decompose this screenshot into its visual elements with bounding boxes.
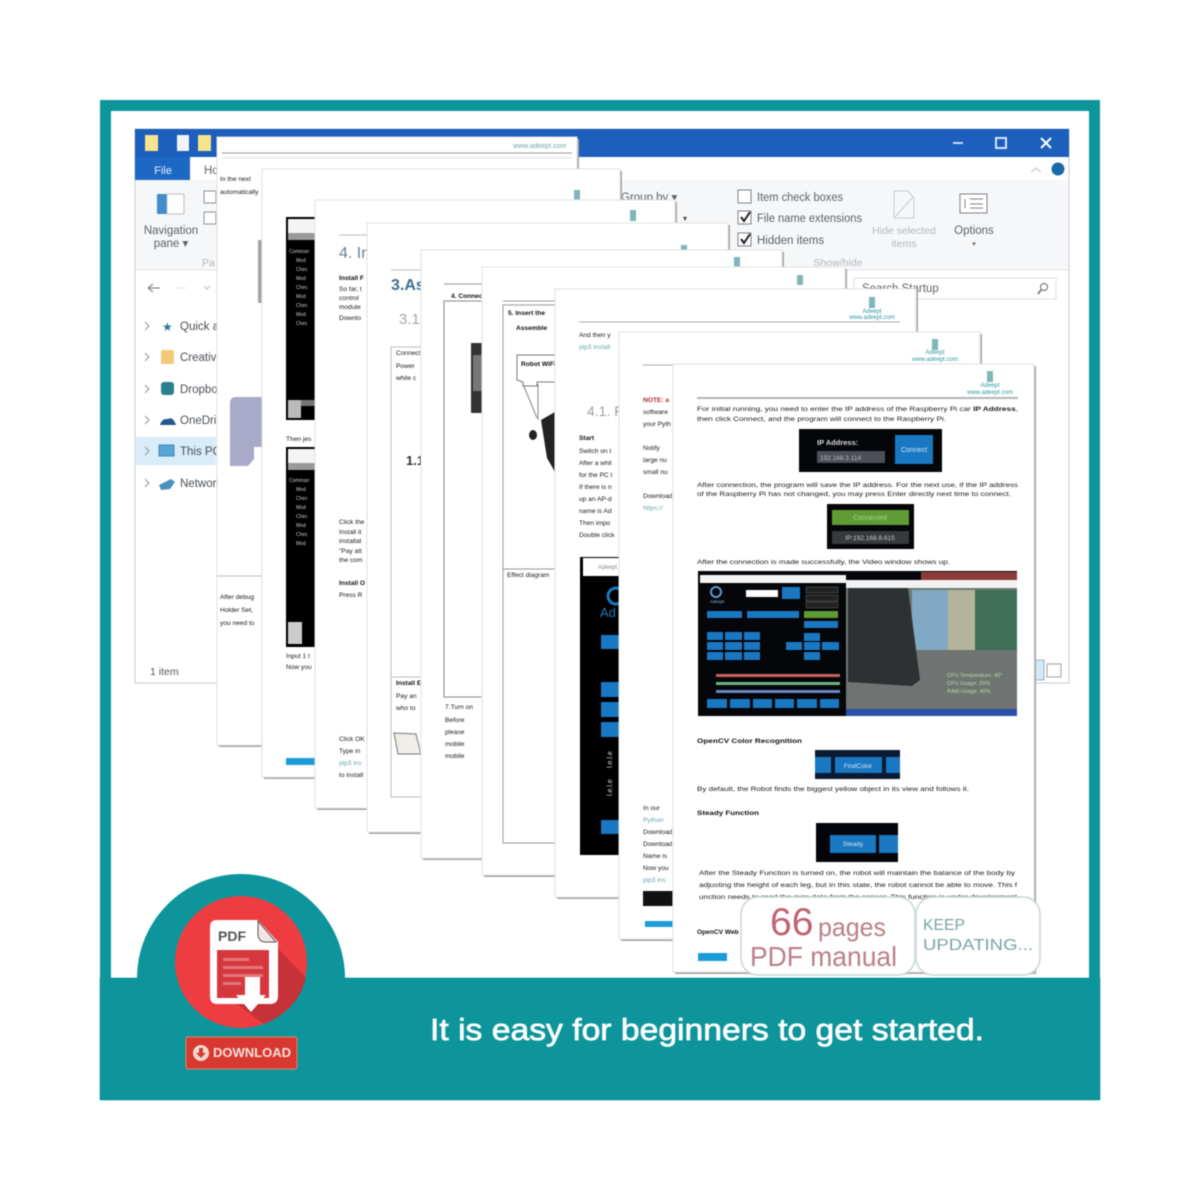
page 3 xyxy=(315,200,677,810)
page 8: Download xyxy=(643,841,673,848)
app screenshot xyxy=(580,557,624,855)
page 1: Holder Set, xyxy=(220,607,253,614)
ribbon: Hidden items xyxy=(757,235,824,247)
camera photo xyxy=(846,580,1017,716)
page 7: up an AP-d xyxy=(579,496,612,503)
camera photo: RAM Usage: 40% xyxy=(947,689,991,695)
terminal screenshots: Mod xyxy=(296,523,306,529)
intro text: then click Connect, and the program will connect to the Raspberry Pi. xyxy=(697,416,946,423)
page 3: pip3 ins xyxy=(339,760,362,767)
page 6: 5. Insert the xyxy=(508,310,545,317)
badge: 66 pages PDF manual xyxy=(741,897,915,975)
terminal screenshots: Chec xyxy=(296,303,308,309)
icon: PDF download xyxy=(175,896,307,1028)
app screenshot: Ad xyxy=(600,605,616,620)
page 8: Now you xyxy=(643,865,669,872)
page 7: Then impo xyxy=(579,520,610,527)
page 4: 1.1 xyxy=(406,453,424,468)
icon: PDF download: PDF xyxy=(218,928,246,944)
find color panel xyxy=(815,750,900,779)
page 7: pip3 install xyxy=(579,344,611,351)
download button: DOWNLOAD xyxy=(213,1046,291,1060)
camera photo: CPU Usage: 20% xyxy=(947,681,990,687)
page 7: Start xyxy=(579,435,595,442)
page 6: Effect diagram xyxy=(507,572,550,579)
connected panel xyxy=(827,504,914,549)
page 7: name is Ad xyxy=(579,508,612,515)
page 8: software xyxy=(643,409,668,416)
terminal screenshots: Comman xyxy=(289,478,310,484)
page 2: Then jes xyxy=(286,436,312,443)
page 9 main document: of the Raspberry Pi has not changed, you may press Enter directly next time to connect. xyxy=(697,491,1011,498)
arrow xyxy=(236,977,266,1012)
page 1: www.adeept.com xyxy=(512,143,566,150)
IP address panel: IP Address: xyxy=(817,438,858,447)
find color panel: FindColor xyxy=(844,763,873,770)
navigation pane: ★ xyxy=(162,320,173,334)
ribbon: Ho xyxy=(204,165,219,177)
terminal screenshots: Chec xyxy=(296,285,308,291)
page 4: 3.1 xyxy=(399,311,420,328)
badge: keep updating xyxy=(916,897,1040,975)
page 8: Name is xyxy=(643,853,668,860)
page 8: Python xyxy=(643,817,664,824)
lavender shape xyxy=(258,240,262,303)
page 6 xyxy=(482,267,847,877)
navigation pane: Network xyxy=(180,478,222,490)
page 8: large nu xyxy=(643,457,667,464)
navigation pane: OneDri xyxy=(180,415,216,427)
terminal screenshots: Mod xyxy=(296,487,306,493)
terminal screenshots xyxy=(286,217,316,647)
page 8: Download xyxy=(643,493,673,500)
app screenshot: Adeept xyxy=(598,565,617,571)
page 3: installat xyxy=(339,538,362,545)
logo: Adeept xyxy=(862,309,882,315)
download button xyxy=(186,1037,297,1069)
badge: keep updating: UPDATING... xyxy=(923,937,1033,954)
page 2 xyxy=(262,169,622,779)
page 3: control xyxy=(339,295,359,302)
logo xyxy=(966,371,1013,396)
terminal screenshots: Chec xyxy=(296,532,308,538)
terminal screenshots: Chec xyxy=(296,267,308,273)
page 3: Type in xyxy=(339,748,361,755)
page 8: Download xyxy=(643,829,673,836)
steady panel: Steady xyxy=(843,841,864,848)
camera photo: CPU Temperature: 40° xyxy=(947,673,1002,679)
logo: www.adeept.com xyxy=(911,357,958,363)
page 8: In our xyxy=(643,805,661,812)
page 4: Power xyxy=(396,363,415,370)
page 7: After a whil xyxy=(579,460,612,467)
page 5: please xyxy=(445,729,465,736)
terminal screenshots: Comman xyxy=(289,249,310,255)
page 3: module xyxy=(339,304,361,311)
page 3: Install it xyxy=(339,529,362,536)
search box: Search Startup xyxy=(862,283,939,295)
terminal screenshots: Mod xyxy=(296,505,306,511)
page 3: Press R xyxy=(339,592,363,599)
logo xyxy=(911,339,958,363)
page 9 main document: OpenCV Color Recognition xyxy=(697,738,802,745)
page 9 main document xyxy=(673,364,1036,974)
navigation pane xyxy=(136,284,222,490)
page 5: mobile xyxy=(445,741,465,748)
video window screenshot xyxy=(698,571,1017,716)
terminal screenshots: Mod xyxy=(296,258,306,264)
ribbon: Options xyxy=(954,225,994,237)
page 9 main document: After connection, the program will save the IP address. For the next use, if the IP address xyxy=(697,482,1019,489)
connected panel: IP:192.168.8.615 xyxy=(845,535,895,542)
ribbon: Pa xyxy=(202,257,215,269)
page 3: the com xyxy=(339,557,363,564)
page 4: Pay an xyxy=(396,693,417,700)
page 3: Click the xyxy=(339,519,365,526)
page 4: Install E xyxy=(396,680,422,687)
terminal screenshots: Mod xyxy=(296,541,306,547)
terminal screenshots: Chec xyxy=(296,514,308,520)
page 7: Switch on t xyxy=(579,448,611,455)
page 1: you need to xyxy=(220,620,255,627)
page 7: If there is n xyxy=(579,484,612,491)
ribbon xyxy=(136,162,1068,270)
page 8 xyxy=(619,332,982,941)
page 2: Input 1 t xyxy=(286,653,310,660)
page 3: Click OK xyxy=(339,736,365,743)
page 8: NOTE: a xyxy=(643,397,669,404)
ribbon: Group by ▾ xyxy=(621,192,677,204)
app screenshot: l.e.l.e xyxy=(607,751,614,768)
heading: 3.As xyxy=(391,277,425,294)
page 1: automatically xyxy=(220,189,259,196)
page 6: Assemble xyxy=(516,325,547,332)
page 9 main document: By default, the Robot finds the biggest yellow object in its view and follows it. xyxy=(697,786,969,793)
page 1: After debug xyxy=(220,594,254,601)
ribbon: ▾ xyxy=(972,241,976,248)
page 9 main document: unction needs to read the gyro data from the sensor. This function is under development xyxy=(699,894,1017,901)
badge: 66 pages PDF manual: pages xyxy=(818,912,886,942)
terminal screenshots: Mod xyxy=(296,294,306,300)
logo xyxy=(848,297,895,321)
page 4: Connect xyxy=(396,350,421,357)
ribbon: Hide selected xyxy=(872,225,936,237)
teal dome and bottom band xyxy=(100,874,1100,1100)
terminal screenshots: Chec xyxy=(296,496,308,502)
terminal screenshots: Mod xyxy=(296,312,306,318)
logo: www.adeept.com xyxy=(848,315,895,321)
heading: 4. In xyxy=(339,245,370,262)
page 7: And then y xyxy=(579,332,611,339)
search box xyxy=(854,278,1056,299)
page 8: small nu xyxy=(643,469,668,476)
page 4: who to xyxy=(395,705,416,712)
page 5: 4. Connect t xyxy=(451,293,490,300)
page 3: So far, t xyxy=(339,286,362,293)
page 9 main document: Steady Function xyxy=(697,810,759,817)
document outline xyxy=(210,920,278,1004)
navigation pane: Creativ xyxy=(180,352,217,364)
page 9 main document: OpenCV Web xyxy=(697,929,739,936)
badge: keep updating: KEEP xyxy=(923,917,965,934)
terminal screenshots: Chec xyxy=(296,321,308,327)
navigation pane: Dropbo xyxy=(180,384,218,396)
ribbon: Show/hide xyxy=(813,257,863,269)
page 7: Double click xyxy=(579,532,615,539)
page 4: while c xyxy=(395,375,417,382)
callout with robot xyxy=(517,355,557,472)
IP address panel: 192.168.3.114 xyxy=(820,455,861,462)
connected panel: Connected xyxy=(853,515,887,522)
IP address panel: Connect xyxy=(901,447,927,454)
page 5 xyxy=(421,250,784,860)
ribbon: Item check boxes xyxy=(757,192,843,204)
ribbon: Navigation xyxy=(144,225,198,237)
folder icon xyxy=(394,733,421,754)
status bar: 1 item xyxy=(150,666,179,678)
tagline: It is easy for beginners to get started. xyxy=(430,1012,984,1047)
page 9 main document: After the connection is made successfully, the Video window shows up. xyxy=(697,559,950,566)
steady panel xyxy=(816,823,898,862)
intro text xyxy=(697,406,1018,423)
page 8: Notify xyxy=(643,445,661,452)
page 3: to install xyxy=(339,772,364,779)
terminal screenshots: Mod xyxy=(296,276,306,282)
page 5: mobile xyxy=(445,753,465,760)
page 3: Install F xyxy=(339,275,364,282)
teal frame background xyxy=(100,100,1100,1100)
title bar xyxy=(135,129,1069,157)
file tab: File xyxy=(154,165,172,177)
ribbon: items xyxy=(891,238,917,250)
page 3: Install O xyxy=(339,580,365,587)
page 9 main document: adjusting the height of each leg, but in this state, the robot cannot be able to move. This f xyxy=(699,882,1017,889)
page 7 xyxy=(555,289,918,899)
badge: 66 pages PDF manual: 66 xyxy=(770,901,813,944)
navigation pane: This PC xyxy=(180,446,221,458)
page 2: Now you xyxy=(286,664,312,671)
page 1 xyxy=(217,137,579,747)
control panel: Adeept xyxy=(710,599,725,604)
navigation pane: Quick a xyxy=(180,321,220,333)
intro text: For initial running, you need to enter the IP address of the Raspberry Pi car IP Address , xyxy=(697,406,1018,413)
page 5: 7.Turn on xyxy=(445,704,473,711)
page 9 main document: After the Steady Function is turned on, the robot will maintain the balance of the body by xyxy=(699,870,1016,877)
app screenshot: l.e.l.e xyxy=(607,779,614,796)
logo: Adeept xyxy=(980,383,1000,389)
control panel xyxy=(700,575,846,708)
ribbon: ▾ xyxy=(683,214,687,223)
page 8: your Pyth xyxy=(643,421,671,428)
page 7: 4.1. F xyxy=(587,403,623,419)
page 8: pip3 ins xyxy=(643,877,666,884)
page 3: "Pay att xyxy=(339,548,362,555)
callout with robot: Robot WiFi xyxy=(521,361,556,368)
file tab xyxy=(135,157,190,180)
page 1: In the next xyxy=(220,176,251,183)
IP address panel xyxy=(799,429,942,472)
logo: www.adeept.com xyxy=(966,390,1013,396)
ribbon: pane ▾ xyxy=(154,238,188,250)
ribbon: File name extensions xyxy=(757,213,862,225)
page 3: Downlo xyxy=(339,315,361,322)
page 4 xyxy=(367,223,730,834)
page 8: https:// xyxy=(643,505,663,512)
page 5: Before xyxy=(445,717,465,724)
status bar xyxy=(150,660,1061,680)
file explorer window xyxy=(135,129,1069,683)
page 7: for the PC t xyxy=(579,472,613,479)
logo: Adeept xyxy=(925,350,945,356)
badge: 66 pages PDF manual: PDF manual xyxy=(750,941,897,972)
